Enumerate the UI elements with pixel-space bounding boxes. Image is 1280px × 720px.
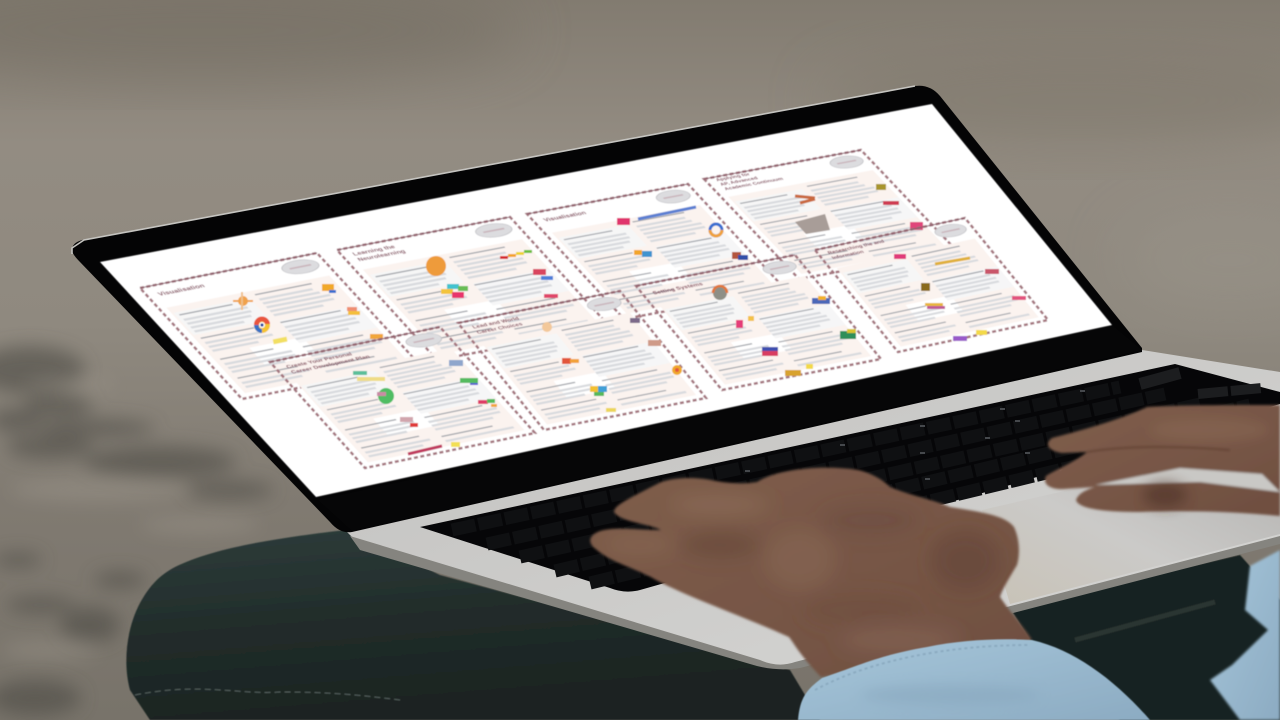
sheet: Visualisation 2: Visualisation xyxy=(542,210,588,223)
sheet: Visualisation xyxy=(140,253,419,399)
sheet: Setting Systems xyxy=(636,255,881,390)
second denim sleeve at right edge xyxy=(1210,550,1280,720)
sheet: Lead and World: Lead and World xyxy=(471,317,521,330)
sheet: Advanced Academic Continuum: AP, Advanced xyxy=(719,176,760,187)
sheet: Create Your Personal xyxy=(270,327,535,468)
sheet: Advanced Academic Continuum: Academic Continuum xyxy=(723,177,785,192)
sheet: Learning the Neurolearning: Learning the xyxy=(351,244,397,257)
screen lid and bezel xyxy=(72,86,1142,532)
sheet: Setting Systems: Setting Systems xyxy=(652,282,705,296)
keyboard xyxy=(420,364,1280,592)
sheet: Lead and World xyxy=(458,291,706,430)
right hand on trackpad xyxy=(1045,405,1280,516)
sheet: Visualisation 2 xyxy=(527,184,785,319)
white screen xyxy=(100,104,1112,497)
sheet: Visualisation: Visualisation xyxy=(157,284,207,297)
sheet: Learning the Neurolearning: Neurolearning xyxy=(356,249,407,263)
sheet: Researching Information xyxy=(815,218,1048,352)
sheet: Lead and World: Career Choices xyxy=(476,322,524,335)
laptop xyxy=(72,86,1280,669)
laptop base xyxy=(345,350,1280,669)
trousers on lap xyxy=(126,530,1280,720)
sheet: Create Your Personal: Create Your Personal xyxy=(285,352,354,370)
sheet: Researching Information: Researching the and xyxy=(827,239,886,256)
sheet: Learning the Neurolearning xyxy=(337,217,610,360)
denim shirt sleeve xyxy=(798,639,1150,720)
left hand on keyboard xyxy=(580,460,1040,685)
sheet: Advanced Academic Continuum xyxy=(704,150,956,279)
sheet: Researching Information: Information xyxy=(831,250,866,261)
sheet: Create Your Personal: Career Development Plan xyxy=(290,355,372,375)
screen with infographic sheets xyxy=(100,104,1112,497)
sheet: Advanced Academic Continuum: Applying for xyxy=(715,172,752,183)
